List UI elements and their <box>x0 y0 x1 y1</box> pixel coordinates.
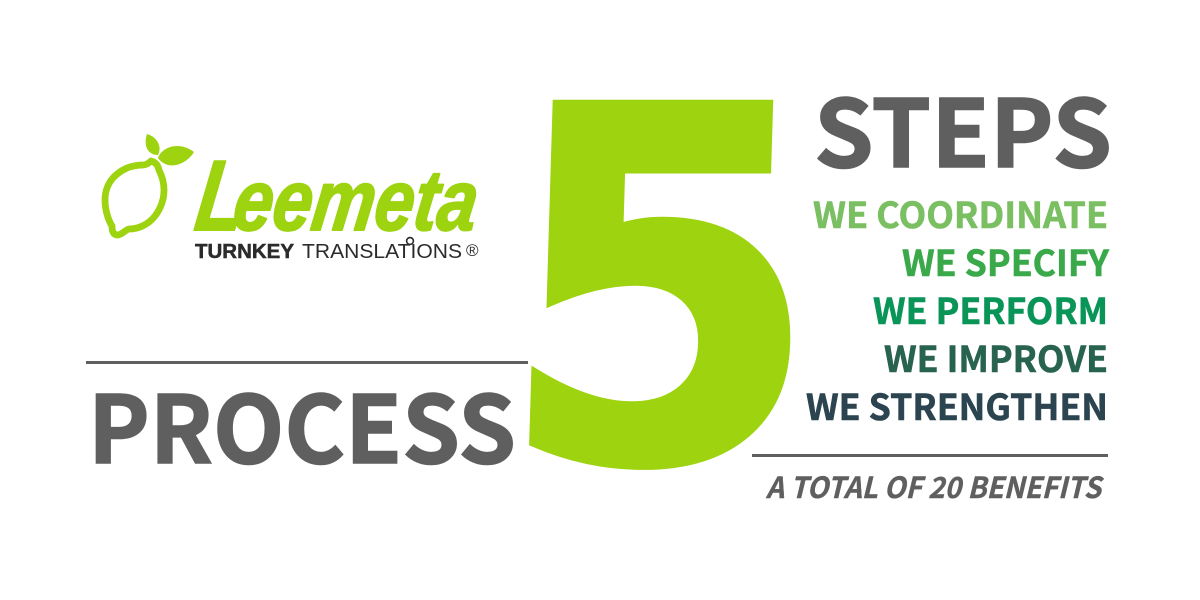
step: we strengthen: WE STRENGTHEN <box>806 379 1108 431</box>
step: we improve: WE IMPROVE <box>884 331 1108 383</box>
step: we specify: WE SPECIFY <box>902 235 1110 287</box>
logo tagline: translations: TRANSLATIONS <box>302 241 462 263</box>
rule above process <box>86 361 528 364</box>
logo wordmark: initial L: L <box>190 140 253 252</box>
registered mark: ® <box>466 241 479 260</box>
step: we coordinate: WE COORDINATE <box>813 187 1108 239</box>
rule above benefits <box>752 454 1108 457</box>
step list <box>806 187 1110 431</box>
icon: lemon with leaves <box>105 134 194 235</box>
logo wordmark: eemeta: eemeta <box>228 153 485 249</box>
logo: Leemeta turnkey translations <box>105 134 485 263</box>
heading: steps: STEPS <box>814 59 1112 194</box>
logo tagline: turnkey: TURNKEY <box>195 241 295 263</box>
icon: key loop on the letter I <box>407 238 413 244</box>
step: we perform: WE PERFORM <box>873 283 1108 335</box>
caption: total benefits: A TOTAL OF 20 BENEFITS <box>765 465 1105 507</box>
heading: process: PROCESS <box>88 355 516 490</box>
big numeral 5: 5 <box>493 5 830 576</box>
